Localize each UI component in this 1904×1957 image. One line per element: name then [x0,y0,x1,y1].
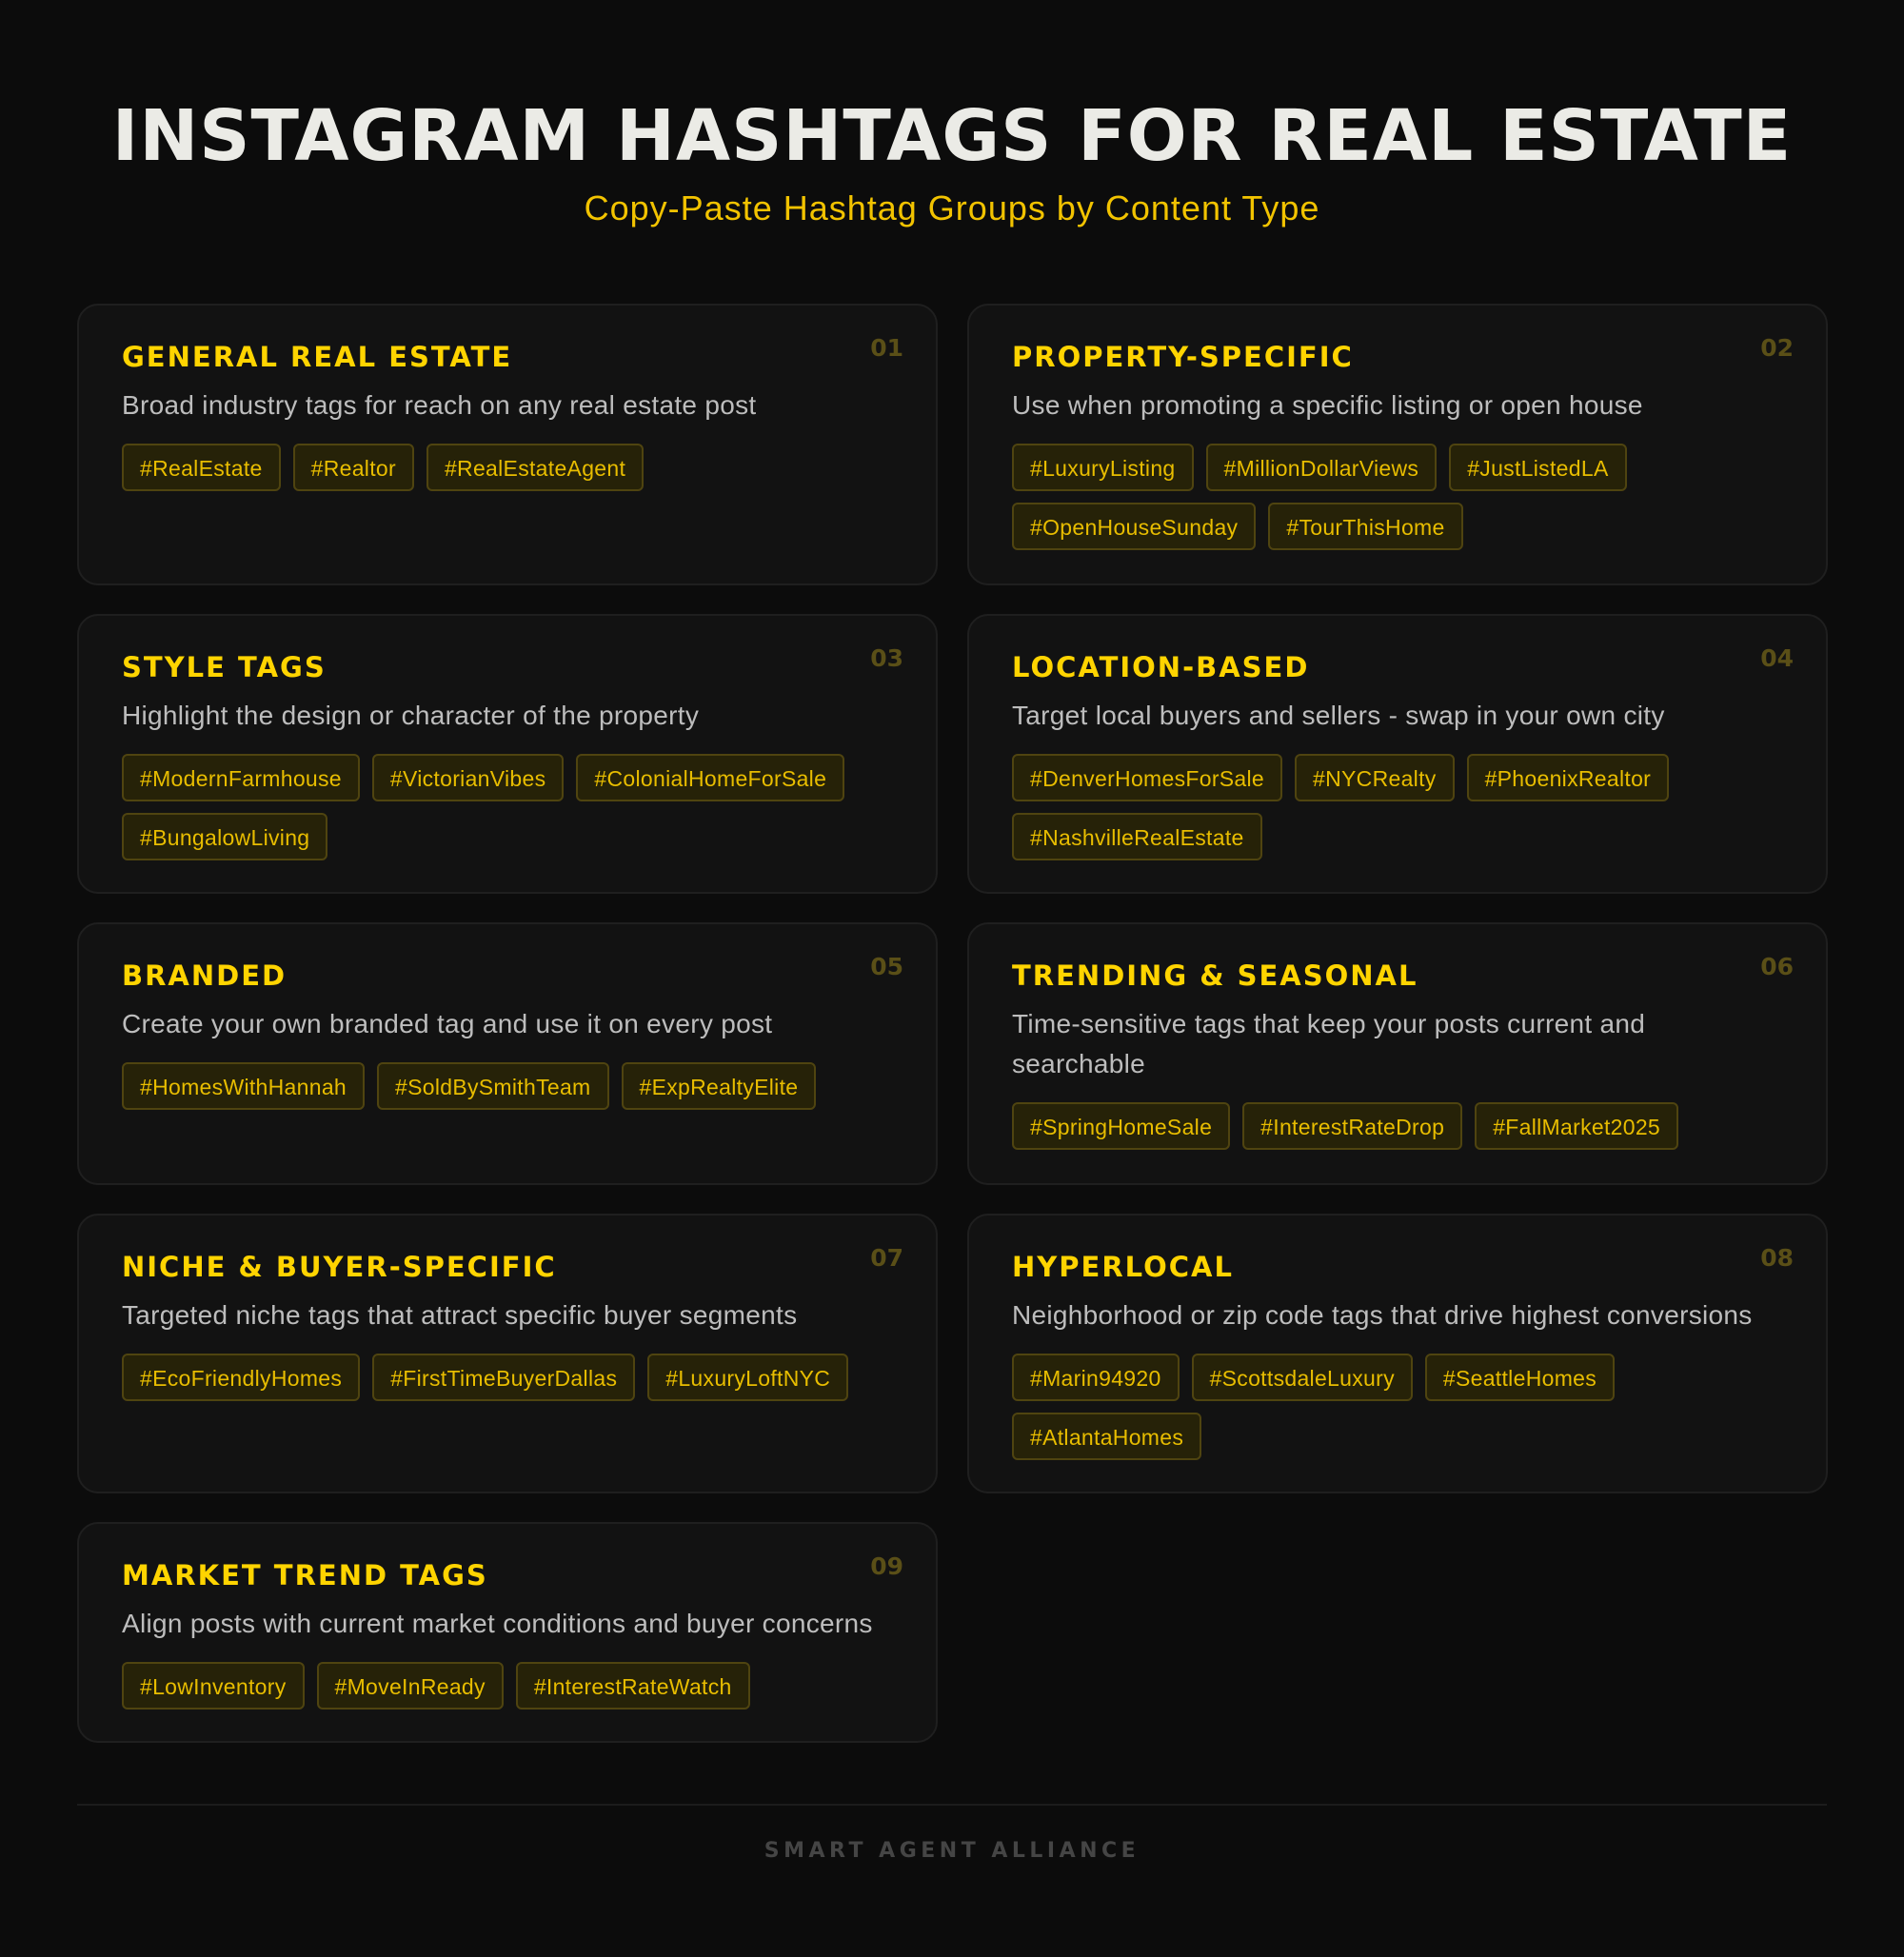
description: Align posts with current market conditions and buyer concerns [122,1609,873,1638]
tags: #LuxuryListing [1030,456,1176,481]
panel: market trend tags [77,1522,938,1743]
heading: MARKET TREND TAGS [122,1559,488,1591]
tags: #FirstTimeBuyerDallas [390,1366,617,1391]
tags: #BungalowLiving [140,825,309,850]
tags [122,754,844,860]
tags: #JustListedLA [1467,456,1609,481]
tags: #ExpRealtyElite [640,1075,798,1099]
title: INSTAGRAM HASHTAGS FOR REAL ESTATE [112,95,1792,177]
description: Highlight the design or character of the property [122,701,699,730]
subtitle: Copy-Paste Hashtag Groups by Content Type [585,188,1319,227]
tags: #InterestRateDrop [1260,1115,1444,1139]
tags: #RealEstateAgent [445,456,625,481]
tags: #TourThisHome [1286,515,1445,540]
tags [122,1354,848,1401]
number: 02 [1760,334,1794,362]
panel: trending & seasonal [967,922,1828,1185]
tags: #LowInventory [140,1674,286,1699]
tags [1012,754,1669,860]
tags: #MillionDollarViews [1224,456,1418,481]
tags: #NashvilleRealEstate [1030,825,1244,850]
heading: STYLE TAGS [122,651,327,683]
number: 08 [1760,1244,1794,1272]
tags: #ColonialHomeForSale [594,766,826,791]
description: Time-sensitive tags that keep your posts current and searchable [1012,1009,1645,1078]
heading: TRENDING & SEASONAL [1012,959,1418,992]
tags: #ModernFarmhouse [140,766,342,791]
tags: #LuxuryLoftNYC [665,1366,830,1391]
panel: general real estate [77,304,938,585]
tags [1012,444,1627,550]
panel: hyperlocal [967,1214,1828,1493]
number: 07 [870,1244,903,1272]
tags: #MoveInReady [335,1674,486,1699]
number: 01 [870,334,903,362]
tags: #NYCRealty [1313,766,1437,791]
description: Broad industry tags for reach on any real estate post [122,390,756,420]
tags: #SpringHomeSale [1030,1115,1212,1139]
description: Targeted niche tags that attract specific buyer segments [122,1300,797,1330]
heading: NICHE & BUYER-SPECIFIC [122,1251,557,1283]
tags: #ScottsdaleLuxury [1210,1366,1395,1391]
heading: PROPERTY-SPECIFIC [1012,341,1354,373]
tags [122,444,644,491]
heading: LOCATION-BASED [1012,651,1309,683]
panel: branded [77,922,938,1185]
number: 03 [870,644,903,672]
panel: location-based [967,614,1828,894]
tags: #Realtor [311,456,396,481]
panel: property-specific [967,304,1828,585]
tags: #SoldBySmithTeam [395,1075,591,1099]
tags: #AtlantaHomes [1030,1425,1183,1450]
number: 04 [1760,644,1794,672]
tags: #PhoenixRealtor [1485,766,1651,791]
tags: #OpenHouseSunday [1030,515,1238,540]
tags: #VictorianVibes [390,766,545,791]
tags: #RealEstate [140,456,263,481]
heading: HYPERLOCAL [1012,1251,1234,1283]
tags [122,1062,816,1110]
tags [1012,1102,1678,1150]
panel: niche & buyer-specific [77,1214,938,1493]
tags: #DenverHomesForSale [1030,766,1264,791]
description: Use when promoting a specific listing or open house [1012,390,1643,420]
tags: #InterestRateWatch [534,1674,732,1699]
number: 09 [870,1552,903,1580]
heading: BRANDED [122,959,287,992]
number: 05 [870,953,903,980]
panel: style tags [77,614,938,894]
tags: #EcoFriendlyHomes [140,1366,342,1391]
tags [122,1662,750,1710]
number: 06 [1760,953,1794,980]
tags: #SeattleHomes [1443,1366,1597,1391]
footer: SMART AGENT ALLIANCE [764,1839,1140,1863]
tags: #FallMarket2025 [1493,1115,1660,1139]
description: Create your own branded tag and use it on every post [122,1009,772,1038]
description: Neighborhood or zip code tags that drive highest conversions [1012,1300,1753,1330]
tags: #Marin94920 [1030,1366,1161,1391]
tags [1012,1354,1615,1460]
description: Target local buyers and sellers - swap in your own city [1012,701,1665,730]
heading: GENERAL REAL ESTATE [122,341,512,373]
tags: #HomesWithHannah [140,1075,347,1099]
